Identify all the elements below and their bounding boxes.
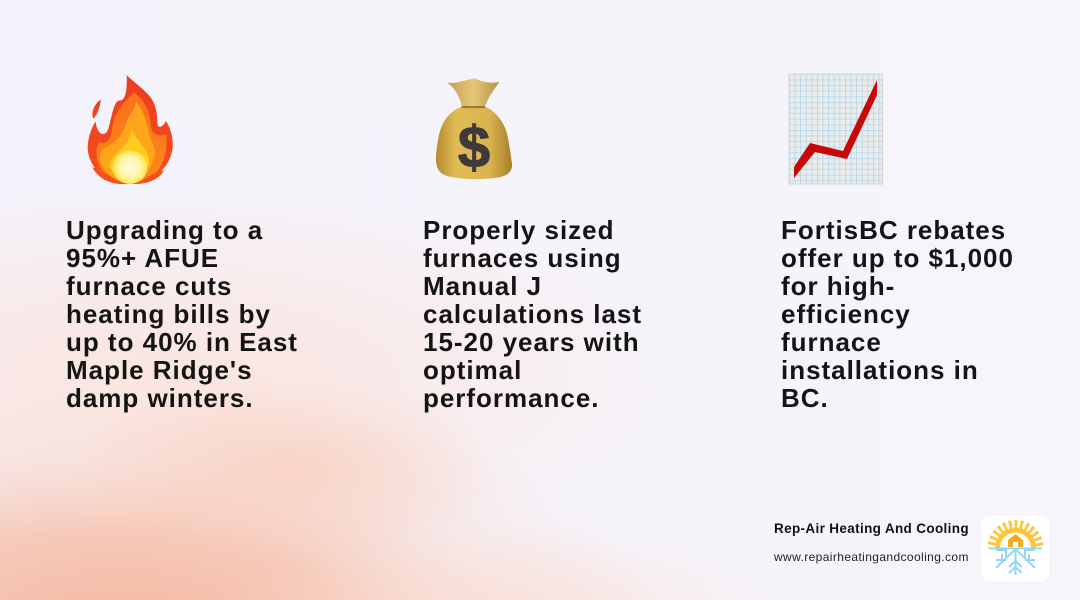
fact: rebates: offer up to $1,000 (781, 243, 1014, 273)
fact: rebates: installations in (781, 355, 979, 385)
fact: furnace savings: furnace cuts (66, 271, 232, 301)
icon: fire: $ (458, 115, 490, 180)
icon: rising chart (789, 74, 882, 184)
fact: furnace savings: Maple Ridge's (66, 355, 253, 385)
fact: proper sizing: 15-20 years with (423, 327, 640, 357)
fact: proper sizing: Properly sized (423, 215, 614, 245)
fact: rebates: BC. (781, 383, 829, 413)
fact: proper sizing: furnaces using (423, 243, 622, 273)
fact: furnace savings: heating bills by (66, 299, 271, 329)
fact: furnace savings: up to 40% in East (66, 327, 298, 357)
fact: rebates (781, 215, 1014, 413)
icon: money bag (436, 78, 512, 179)
fact: proper sizing: Manual J (423, 271, 542, 301)
fact: proper sizing: performance. (423, 383, 599, 413)
fact: furnace savings: 95%+ AFUE (66, 243, 219, 273)
brand name: Rep-Air Heating And Cooling (774, 521, 969, 536)
fact: proper sizing: calculations last (423, 299, 642, 329)
fact: rebates: furnace (781, 327, 882, 357)
fact: rebates: FortisBC rebates (781, 215, 1006, 245)
website: www.repairheatingandcooling.com (774, 550, 969, 564)
fact: furnace savings: damp winters. (66, 383, 254, 413)
fact: proper sizing: optimal (423, 355, 522, 385)
fact: rebates: for high- (781, 271, 895, 301)
fact: furnace savings: Upgrading to a (66, 215, 263, 245)
fact: furnace savings (66, 215, 298, 413)
fact: proper sizing (423, 215, 642, 413)
fact: rebates: efficiency (781, 299, 911, 329)
logo (982, 516, 1049, 581)
